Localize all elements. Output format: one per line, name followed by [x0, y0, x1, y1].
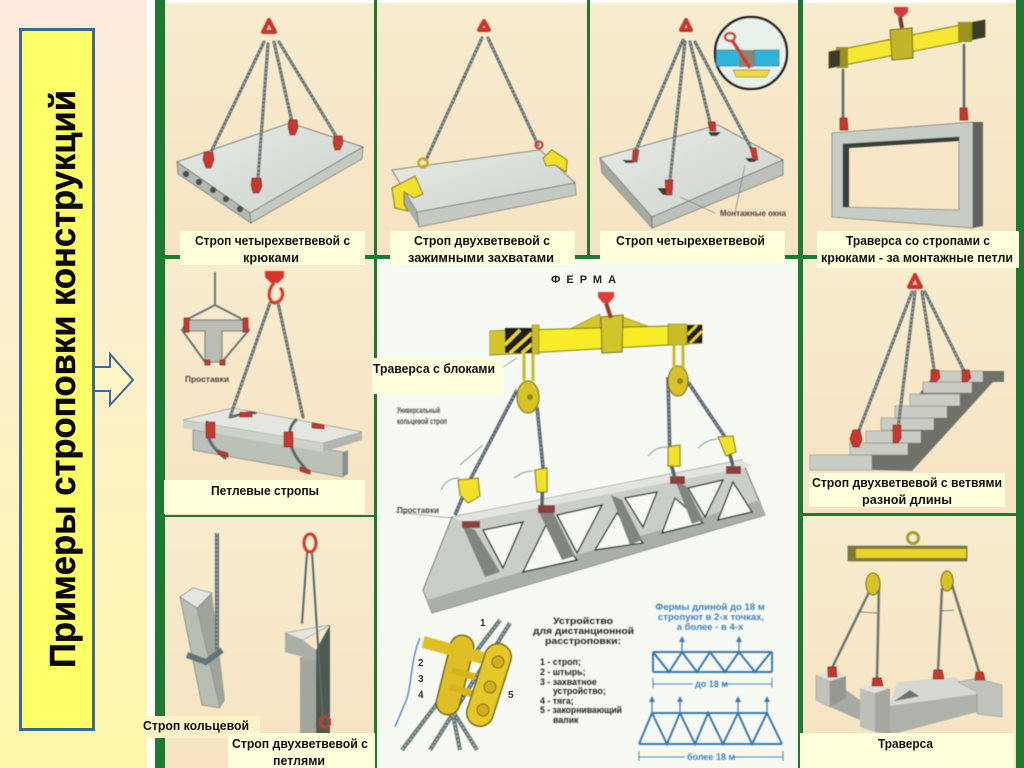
caption: ring sling: Строп кольцевой — [143, 719, 249, 733]
illustration: traverse with pulleys lifting truss: кольцевой строп — [397, 417, 447, 426]
inset: mounting window detail — [715, 17, 787, 89]
caption: traverse with pulleys: Траверса с блоками — [373, 362, 495, 376]
callout numbers for release device: 3 — [418, 674, 424, 685]
text block: release device legend: Устройство — [553, 616, 614, 626]
caption: loop slings: Петлевые стропы — [211, 484, 319, 498]
text block: release device legend: 5 - закорнивающий — [540, 705, 622, 715]
caption: two-leg sling different lengths: разной длины — [862, 493, 952, 507]
text block: release device legend: валик — [553, 715, 579, 725]
text block: release device legend: 3 - захватное — [540, 677, 597, 687]
text block: release device legend: расстроповки: — [545, 636, 621, 646]
illustration: loop slings on T-beam with spacer inset: Проставки — [185, 375, 229, 384]
diagram: truss over 18 m, 4-point lift: более 18 м — [687, 752, 735, 762]
caption: two-leg sling with clamps — [390, 231, 575, 265]
text block: release device legend — [533, 616, 634, 725]
text block: release device legend: устройство; — [553, 686, 606, 696]
illustration: two-leg sling with loops on column — [285, 534, 330, 735]
caption: loop slings — [164, 480, 365, 514]
illustration: traverse with pulleys lifting truss: Универсальный — [397, 406, 440, 415]
caption: two-leg sling with loops: Строп двухветвевой с — [232, 737, 368, 751]
caption: traverse with pulleys — [372, 358, 503, 394]
caption: traverse with hook slings — [817, 231, 1019, 268]
caption: four-leg sling: Строп четырехветвевой — [616, 234, 765, 248]
caption: four-leg sling with hooks — [180, 231, 365, 265]
callout numbers for release device — [418, 618, 514, 701]
illustration: traverse with pulleys lifting truss — [395, 292, 765, 613]
illustration: traverse lifting concrete block with pulleys — [816, 532, 1002, 735]
text block: release device legend: 1 - строп; — [540, 657, 581, 667]
title box — [20, 30, 94, 730]
caption: two-leg sling with loops — [228, 733, 375, 768]
caption: four-leg sling with hooks: крюками — [243, 251, 299, 265]
caption: ring sling — [143, 716, 260, 738]
caption: four-leg sling — [600, 231, 785, 263]
caption: traverse with hook slings: крюками - за монтажные петли — [821, 251, 1013, 265]
diagram: truss up to 18 m, 2-point lift: до 18 м — [695, 679, 728, 689]
arrow pointing to panels — [94, 354, 133, 405]
title box: Примеры строповки конструкций — [42, 90, 83, 668]
caption: two-leg sling different lengths: Строп двухветвевой с ветвями — [812, 476, 1002, 490]
callout numbers for release device: 4 — [418, 690, 424, 701]
caption: traverse — [800, 733, 1014, 768]
diagram: truss over 18 m, 4-point lift — [639, 696, 783, 762]
illustration: remote release device — [395, 620, 510, 750]
text block: release device legend: 2 - штырь; — [540, 667, 586, 677]
illustration: four-leg sling through mounting windows — [600, 20, 787, 228]
illustration: traverse lifting a frame panel — [829, 7, 985, 228]
caption: two-leg sling with clamps: зажимными захватами — [408, 251, 554, 265]
illustration: loop slings on T-beam with spacer inset — [182, 271, 362, 477]
caption: two-leg sling different lengths — [809, 473, 1005, 507]
caption: four-leg sling with hooks: Строп четырехветвевой с — [195, 234, 350, 248]
diagram: truss up to 18 m, 2-point lift — [653, 636, 772, 689]
illustration: ring sling on tilted column — [180, 533, 225, 708]
callout numbers for release device: 5 — [508, 690, 514, 701]
illustration: four-leg sling through mounting windows: Монтажные окна — [720, 209, 787, 218]
illustration: two-leg sling with clamps — [392, 21, 576, 227]
caption: two-leg sling with clamps: Строп двухветвевой с — [414, 234, 550, 248]
text block: blue truss note — [655, 602, 765, 633]
illustration: sling on stair flight — [810, 275, 1004, 471]
text block: release device legend: 4 - тяга; — [540, 696, 574, 706]
text block: release device legend: для дистанционной — [533, 626, 634, 636]
text block: blue truss note: стропуют в 2-х точках, — [658, 612, 764, 623]
illustration: traverse with pulleys lifting truss: Проставки — [397, 506, 439, 515]
illustration: four-leg sling on hollow-core slab — [177, 20, 363, 223]
caption: traverse with hook slings: Траверса со стропами с — [846, 234, 990, 248]
caption: two-leg sling with loops: петлями — [273, 754, 325, 768]
callout numbers for release device: 2 — [418, 658, 424, 669]
heading: truss: ФЕРМА — [551, 274, 622, 286]
callout numbers for release device: 1 — [480, 618, 486, 629]
text block: blue truss note: Фермы длиной до 18 м — [655, 602, 765, 613]
text block: blue truss note: а более - в 4-х — [677, 622, 744, 633]
left background band — [0, 0, 147, 768]
caption: traverse: Траверса — [878, 737, 934, 751]
